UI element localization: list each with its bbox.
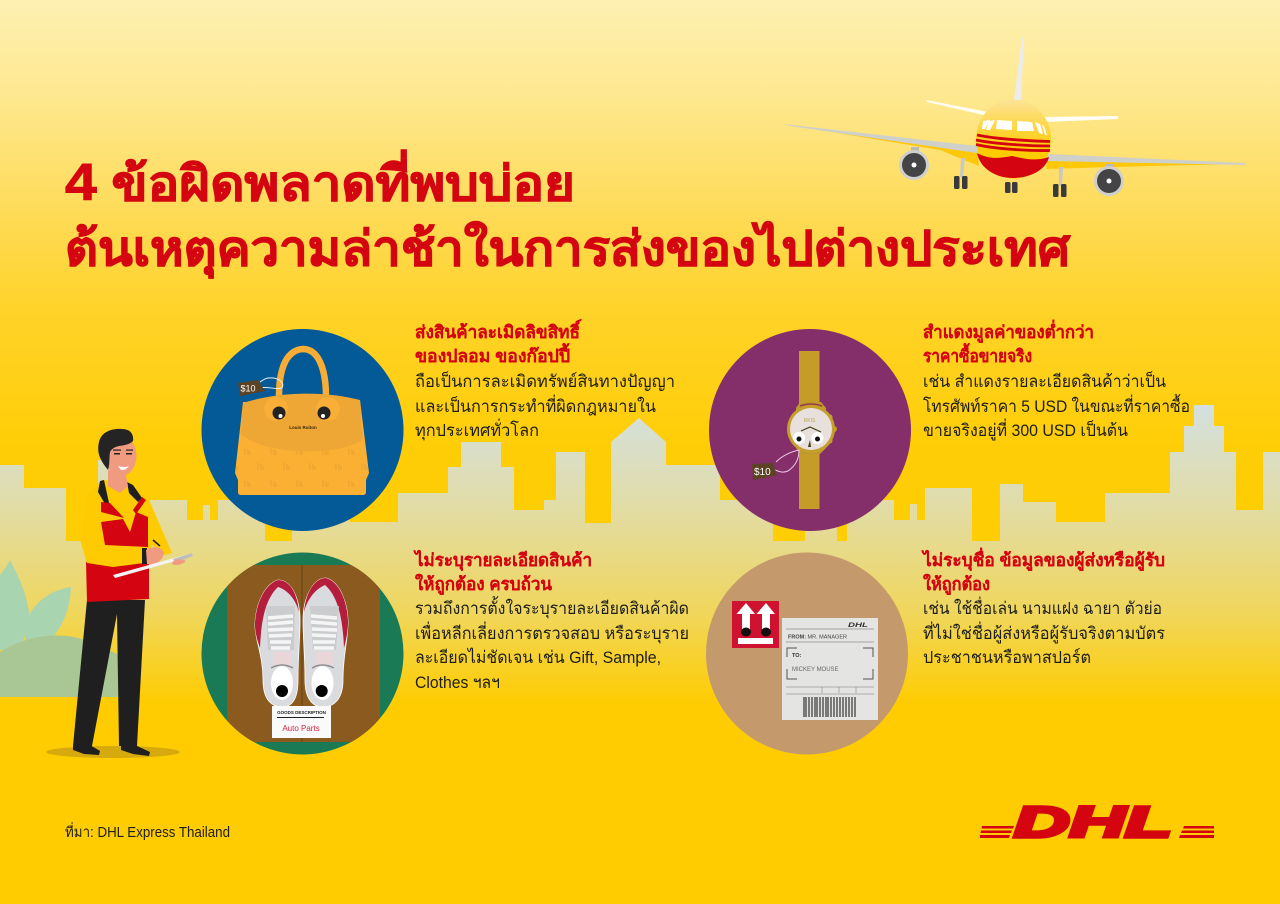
text block: ขายจริงอยู่ที่ 300 USD เป็นต้น — [923, 418, 1128, 441]
trousers — [73, 600, 145, 746]
text block — [415, 318, 675, 441]
text block — [921, 547, 1165, 667]
title — [65, 149, 1072, 279]
collar — [98, 480, 146, 518]
text block: โทรศัพท์ราคา 5 USD ในขณะที่ราคาซื้อ — [923, 394, 1190, 416]
icon: price tag — [238, 378, 283, 396]
airplane illustration — [783, 37, 1245, 197]
icon: price tag — [752, 450, 799, 480]
goods description label: Auto Parts — [282, 724, 320, 733]
text block: ของปลอม ของก๊อปปี้ — [415, 343, 570, 366]
title: ต้นเหตุความล่าช้าในการส่งของไปต่างประเทศ — [65, 220, 1072, 279]
icon: parcel box — [227, 565, 380, 742]
jacket body — [80, 480, 172, 567]
text block — [413, 549, 689, 692]
smile — [118, 466, 129, 470]
engines — [899, 147, 1124, 196]
icon: watch: RKIS — [804, 418, 816, 424]
stabilizers — [926, 100, 1118, 122]
text block: ให้ถูกต้อง ครบถ้วน — [415, 573, 552, 596]
circle: purple — [709, 329, 911, 531]
wings — [783, 124, 1245, 169]
icon: watch — [787, 351, 837, 509]
icon: right sneaker — [303, 578, 348, 707]
hair — [98, 429, 133, 470]
text block: ถือเป็นการละเมิดทรัพย์สินทางปัญญา — [415, 370, 675, 391]
city skyline — [0, 405, 1280, 705]
red belly — [977, 153, 1049, 178]
text block: ละเอียดไม่ชัดเจน เช่น Gift, Sample, — [415, 647, 661, 667]
circle: blue — [202, 329, 404, 531]
text block: ประชาชนหรือพาสปอร์ต — [923, 648, 1091, 667]
source note: ที่มา: DHL Express Thailand — [65, 822, 230, 841]
circle: green — [202, 552, 404, 754]
text block: และเป็นการกระทำที่ผิดกฎหมายใน — [415, 394, 656, 416]
text block: ราคาซื้อขายจริง — [923, 343, 1032, 366]
text block: Clothes ฯลฯ — [415, 673, 500, 692]
panel: incorrect sender or receiver name — [706, 547, 1165, 754]
jacket hem — [86, 558, 149, 602]
clipboard — [113, 553, 193, 578]
goods description label — [272, 706, 331, 738]
text block: ไม่ระบุชื่อ ข้อมูลของผู้ส่งหรือผู้รับ — [921, 547, 1165, 572]
shipping label: DHL — [848, 622, 868, 629]
eyes — [113, 450, 133, 454]
icon: price tag: $10 — [240, 384, 256, 394]
text block: ให้ถูกต้อง — [923, 573, 990, 596]
text block: ไม่ระบุรายละเอียดสินค้า — [413, 549, 592, 571]
text block: เช่น สำแดงรายละเอียดสินค้าว่าเป็น — [923, 370, 1166, 391]
title: 4 ข้อผิดพลาดที่พบบ่อย — [65, 149, 575, 212]
red chest panel — [101, 512, 148, 547]
panel: incomplete goods description — [202, 549, 689, 754]
circle: tan — [706, 552, 908, 754]
panel: under-declared value — [709, 319, 1190, 531]
icon: price tag: $10 — [754, 467, 771, 478]
tail fin — [1014, 37, 1024, 100]
shoes — [73, 744, 150, 756]
bushes — [0, 560, 140, 697]
shipping label: FROM: MR. MANAGER — [788, 634, 847, 640]
text block: สำแดงมูลค่าของต่ำกว่า — [923, 319, 1094, 344]
icon: left sneaker — [255, 580, 300, 707]
head — [106, 436, 136, 476]
icon: handbag — [235, 349, 369, 495]
cockpit windows — [982, 120, 1047, 135]
shipping label: TO: — [792, 653, 802, 659]
panel: counterfeit goods — [202, 318, 675, 531]
ground shadow — [46, 746, 180, 758]
icon: this way up sticker — [732, 601, 779, 648]
shipping label — [782, 618, 878, 720]
text block: เพื่อหลีกเลี่ยงการตรวจสอบ หรือระบุราย — [415, 621, 689, 644]
red stripes — [976, 135, 1050, 151]
icon: handbag: Louis Ruiton — [289, 425, 317, 430]
DHL logo — [980, 798, 1214, 847]
goods description label: GOODS DESCRIPTION — [277, 710, 326, 715]
landing gear — [954, 158, 1066, 197]
text block: ส่งสินค้าละเมิดลิขสิทธิ์ — [415, 318, 582, 342]
cuff and hand — [142, 540, 164, 564]
shipping label: MICKEY MOUSE — [792, 667, 839, 673]
text block: เช่น ใช้ชื่อเล่น นามแฝง ฉายา ตัวย่อ — [923, 596, 1162, 618]
courier figure — [46, 429, 193, 758]
fuselage — [976, 100, 1051, 178]
text block: รวมถึงการตั้งใจระบุรายละเอียดสินค้าผิด — [415, 596, 689, 619]
text block: ที่ไม่ใช่ชื่อผู้ส่งหรือผู้รับจริงตามบัตร — [923, 621, 1165, 644]
DHL logo: DHL — [1014, 798, 1172, 847]
text block: ทุกประเทศทั่วโลก — [415, 418, 539, 441]
text block — [923, 319, 1190, 441]
neck — [108, 470, 128, 493]
